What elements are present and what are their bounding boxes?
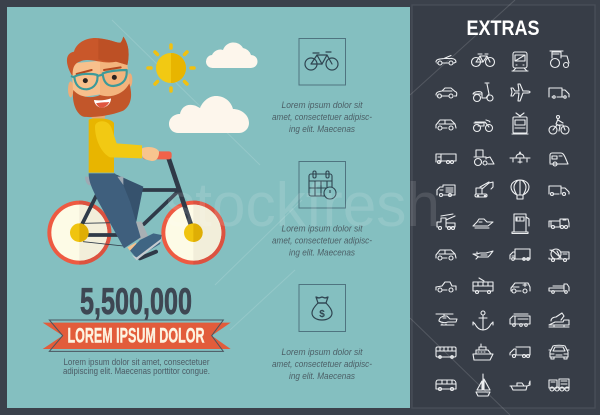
icon: tanker truck	[436, 154, 456, 164]
mouth	[94, 98, 111, 108]
icon: tram	[512, 113, 528, 134]
icon: lorry	[510, 249, 530, 260]
icon: box truck	[437, 185, 455, 196]
icon: helicopter	[436, 314, 457, 325]
icon: minivan	[436, 120, 456, 130]
illustration: large cloud	[169, 96, 249, 133]
icon: van	[549, 88, 569, 98]
torso	[89, 118, 114, 173]
glasses	[71, 70, 127, 89]
icon: tractor	[550, 51, 569, 68]
icon: convertible	[436, 56, 456, 65]
icon: sailboat	[476, 374, 490, 396]
text block 3: amet, consectetuer adipisc-	[272, 359, 372, 369]
panel: extras sidebar	[412, 5, 595, 408]
icon box: money bag: $	[319, 309, 325, 320]
icon: anchor	[473, 311, 493, 330]
eyebrows	[77, 67, 121, 74]
icon: plane	[511, 84, 530, 101]
watermark: stockfresh	[165, 171, 440, 240]
icon: car front	[549, 345, 569, 359]
panel: main teal area	[7, 7, 410, 408]
icon grid: transport icons	[436, 51, 569, 396]
text block 1: Lorem ipsum dolor sit	[282, 100, 363, 110]
icon: jet front	[510, 152, 530, 163]
ankle	[127, 243, 137, 252]
text block 1: ing elit. Maecenas	[289, 124, 355, 134]
ear	[68, 81, 73, 97]
icon: motor boat	[510, 381, 530, 390]
icon: mixer truck	[549, 313, 569, 327]
handlebar grip	[143, 151, 172, 159]
bike frame	[82, 158, 191, 246]
icon box: money bag	[299, 284, 346, 332]
illustration: hipster cyclist	[47, 37, 225, 265]
text block 1	[272, 100, 372, 134]
icon: cement mixer	[549, 249, 569, 262]
text block 3: ing elit. Maecenas	[289, 371, 355, 381]
icon: pickup	[436, 282, 456, 292]
caption text: adipiscing elit. Maecenas porttitor congue.	[63, 366, 210, 376]
icon: family van	[436, 250, 456, 260]
illustration: small cloud	[206, 42, 258, 68]
heading: extras: EXTRAS	[466, 17, 540, 40]
icon: car	[436, 88, 457, 98]
front wheel	[161, 201, 225, 265]
neck	[92, 113, 105, 118]
icon: ambulance	[511, 283, 530, 293]
hand	[142, 147, 159, 161]
watermark diagonal lines	[112, 0, 515, 415]
icon: dump truck	[549, 219, 569, 228]
icon: crane truck	[437, 214, 455, 230]
icon: scooter	[473, 83, 493, 102]
icon: cyclist	[549, 116, 569, 134]
icon: coach	[436, 380, 456, 390]
icon: fire truck	[510, 314, 530, 326]
icon: delivery truck	[549, 186, 569, 196]
icon box: calendar	[299, 162, 346, 208]
icon: bus	[436, 347, 456, 358]
icon: fuel pump	[512, 214, 529, 234]
icon: hot air balloon	[511, 180, 529, 199]
arm	[95, 121, 142, 158]
icon: bulldozer	[474, 150, 494, 166]
icon: train	[512, 52, 528, 71]
text block 2	[272, 224, 372, 258]
caption text	[63, 357, 210, 376]
beard	[73, 83, 131, 117]
text block 3	[272, 347, 372, 381]
icon: semi truck	[510, 347, 530, 358]
saddle	[85, 177, 123, 185]
icon: flatbed truck	[549, 284, 569, 293]
eyes	[83, 75, 117, 83]
wheel hubs	[70, 223, 203, 242]
banner label: LOREM IPSUM DOLOR	[68, 324, 204, 348]
near leg	[89, 173, 141, 248]
hair	[67, 37, 129, 75]
icon: bicycle	[472, 54, 494, 66]
icon: motorcycle	[474, 120, 492, 132]
text block 2: ing elit. Maecenas	[289, 248, 355, 258]
pedal	[140, 252, 156, 258]
big number: 5,500,000	[80, 281, 192, 322]
shoe	[130, 233, 162, 260]
illustration: sun	[148, 45, 194, 91]
back wheel	[47, 201, 111, 265]
icon: cruise ship	[473, 344, 493, 360]
text block 3: Lorem ipsum dolor sit	[282, 347, 363, 357]
icon: yacht	[473, 219, 493, 228]
icon: heavy truck	[549, 379, 569, 391]
icon: speedboat	[473, 251, 493, 259]
icon: caravan	[550, 153, 568, 166]
text block 2: Lorem ipsum dolor sit	[282, 224, 363, 234]
far leg	[115, 174, 145, 240]
text block 1: amet, consectetuer adipisc-	[272, 112, 372, 122]
icon: trolleybus	[473, 278, 493, 294]
face	[72, 58, 130, 98]
icon box: bicycle	[299, 38, 346, 85]
ribbon banner	[43, 320, 231, 351]
icon: excavator	[475, 182, 493, 197]
text block 2: amet, consectetuer adipisc-	[272, 236, 372, 246]
caption text: Lorem ipsum dolor sit amet, consectetuer	[64, 357, 210, 367]
